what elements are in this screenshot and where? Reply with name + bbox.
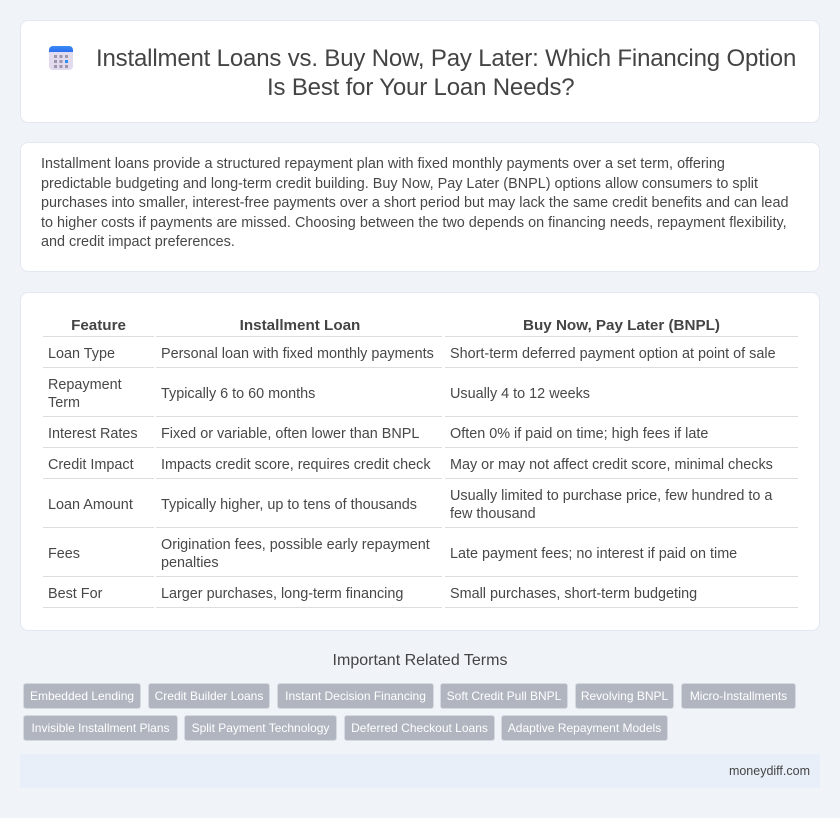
- table panel: [20, 292, 820, 631]
- intro text: and credit impact preferences.: [41, 234, 235, 250]
- row: fees: Late payment fees; no interest if paid on time: [450, 546, 737, 562]
- table header: Installment Loan: [240, 317, 360, 334]
- row: repayment term: Term: [48, 395, 80, 411]
- row: credit impact: [48, 457, 773, 473]
- row: interest rates: Often 0% if paid on time; high fees if late: [450, 426, 708, 442]
- related terms tags: [23, 683, 796, 741]
- row: credit impact: May or may not affect credit score, minimal checks: [450, 457, 773, 473]
- row: loan amount: Usually limited to purchase price, few hundred to a: [450, 488, 772, 504]
- intro text: Installment loans provide a structured repayment plan with fixed monthly payments over a set term, offering: [41, 156, 725, 172]
- row: repayment term: Usually 4 to 12 weeks: [450, 386, 590, 402]
- row: fees: Fees: [48, 546, 80, 562]
- related terms tags: Revolving BNPL: [581, 689, 668, 703]
- row: loan type: Short-term deferred payment option at point of sale: [450, 346, 776, 362]
- title: Installment Loans vs. Buy Now, Pay Later: Which Financing Option: [96, 45, 796, 72]
- related terms tags: Embedded Lending: [30, 689, 134, 703]
- related terms tags: Credit Builder Loans: [155, 689, 263, 703]
- row: interest rates: Interest Rates: [48, 426, 138, 442]
- intro text: [41, 156, 788, 250]
- row: loan type: Loan Type: [48, 346, 115, 362]
- table header: Feature: [71, 317, 126, 334]
- icon: calendar: [49, 46, 73, 70]
- intro text: purchases into smaller, interest-free payments over a short period but may lack the same credit benefits and can lead: [41, 195, 788, 211]
- related terms tags: Invisible Installment Plans: [31, 721, 170, 735]
- row: interest rates: [48, 426, 708, 442]
- row: repayment term: Repayment: [48, 377, 122, 393]
- row: loan amount: Typically higher, up to tens of thousands: [161, 497, 417, 513]
- header panel: [20, 20, 820, 123]
- row: repayment term: Typically 6 to 60 months: [161, 386, 315, 402]
- table header: Buy Now, Pay Later (BNPL): [523, 317, 720, 334]
- related terms tags: Split Payment Technology: [192, 721, 329, 735]
- intro text: predictable budgeting and long-term credit building. Buy Now, Pay Later (BNPL) options allow consumers to split: [41, 176, 758, 192]
- row: loan amount: few thousand: [450, 506, 536, 522]
- row: fees: penalties: [161, 555, 219, 571]
- row: fees: [48, 537, 737, 571]
- row: loan amount: [48, 488, 772, 522]
- row: interest rates: Fixed or variable, often lower than BNPL: [161, 426, 419, 442]
- row: loan type: Personal loan with fixed monthly payments: [161, 346, 434, 362]
- row: loan amount: Loan Amount: [48, 497, 133, 513]
- row: fees: Origination fees, possible early repayment: [161, 537, 430, 553]
- title: [96, 45, 796, 101]
- row: credit impact: Impacts credit score, requires credit check: [161, 457, 431, 473]
- intro panel: [20, 142, 820, 272]
- row: best for: [48, 586, 697, 602]
- related terms tags: Soft Credit Pull BNPL: [447, 689, 561, 703]
- related terms tags: Micro-Installments: [690, 689, 787, 703]
- row: best for: Best For: [48, 586, 102, 602]
- related terms tags: Instant Decision Financing: [285, 689, 426, 703]
- row: credit impact: Credit Impact: [48, 457, 134, 473]
- row: repayment term: [48, 377, 590, 411]
- row: best for: Larger purchases, long-term financing: [161, 586, 403, 602]
- footer bar: moneydiff.com: [729, 764, 810, 778]
- related terms heading: Important Related Terms: [333, 652, 507, 669]
- table header: [71, 317, 720, 334]
- comparison table: [43, 317, 798, 608]
- related terms tags: Adaptive Repayment Models: [508, 721, 661, 735]
- row: best for: Small purchases, short-term budgeting: [450, 586, 697, 602]
- related terms tags: Deferred Checkout Loans: [351, 721, 488, 735]
- title: Is Best for Your Loan Needs?: [267, 74, 574, 101]
- intro text: to higher costs if payments are missed. Choosing between the two depends on financing needs, repayment flexibility,: [41, 215, 787, 231]
- row: loan type: [48, 346, 776, 362]
- footer bar: [20, 754, 820, 788]
